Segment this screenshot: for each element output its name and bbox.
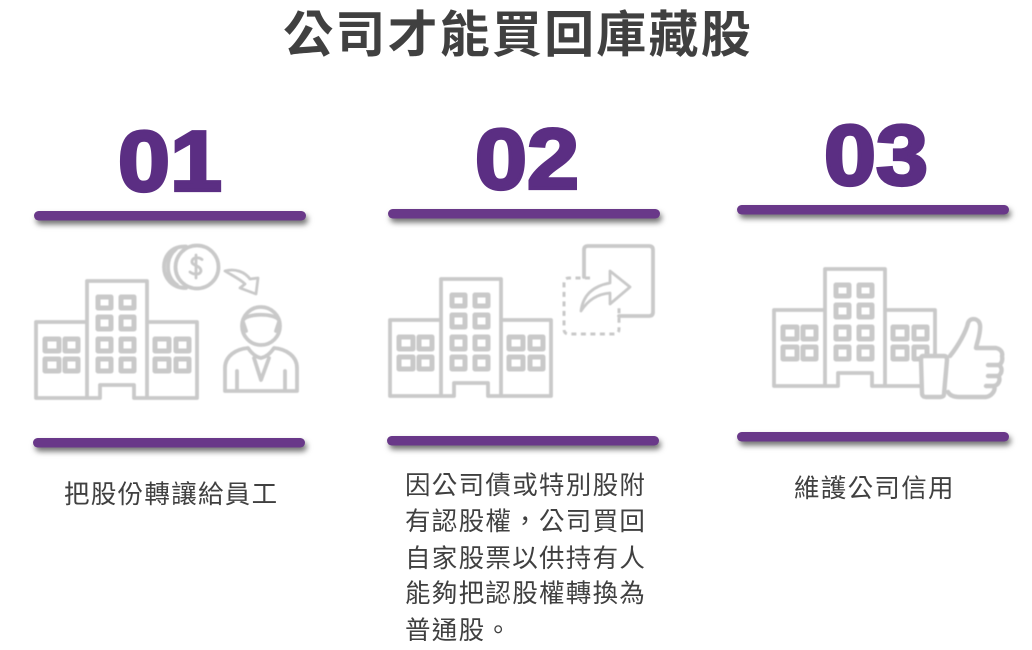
text 2: 有認股權，公司買回 — [405, 508, 646, 536]
title: 公司才能買回庫藏股 — [283, 7, 753, 63]
bottom bar 2 — [387, 436, 659, 446]
bottom bar 3 — [737, 432, 1009, 442]
icon: thumbs up — [921, 319, 1002, 397]
text 2: 普通股。 — [405, 617, 512, 645]
text 1: 把股份轉讓給員工 — [64, 481, 278, 509]
top bar 1 — [34, 211, 306, 220]
icon: arrow to employee — [225, 270, 258, 294]
text 2: 自家股票以供持有人 — [405, 545, 646, 573]
panel: column 1 — [33, 113, 306, 509]
icon: coins — [164, 246, 218, 288]
number 03: 03 — [824, 107, 928, 203]
number 01: 01 — [118, 113, 222, 209]
icon: building 1 — [36, 281, 197, 398]
icon: building 3 — [774, 269, 935, 386]
text 2 — [405, 472, 646, 645]
top bar 3 — [737, 205, 1009, 214]
icon: share arrow — [564, 246, 653, 334]
icon: employee — [225, 307, 297, 391]
number 02: 02 — [475, 111, 579, 207]
bottom bar 1 — [33, 438, 305, 448]
text 3: 維護公司信用 — [794, 475, 955, 503]
panel: column 2 — [387, 111, 660, 645]
text 2: 因公司債或特別股附 — [405, 472, 646, 500]
text 2: 能夠把認股權轉換為 — [405, 580, 646, 608]
panel: column 3 — [737, 107, 1009, 503]
top bar 2 — [388, 209, 660, 218]
icon: building 2 — [390, 279, 551, 396]
